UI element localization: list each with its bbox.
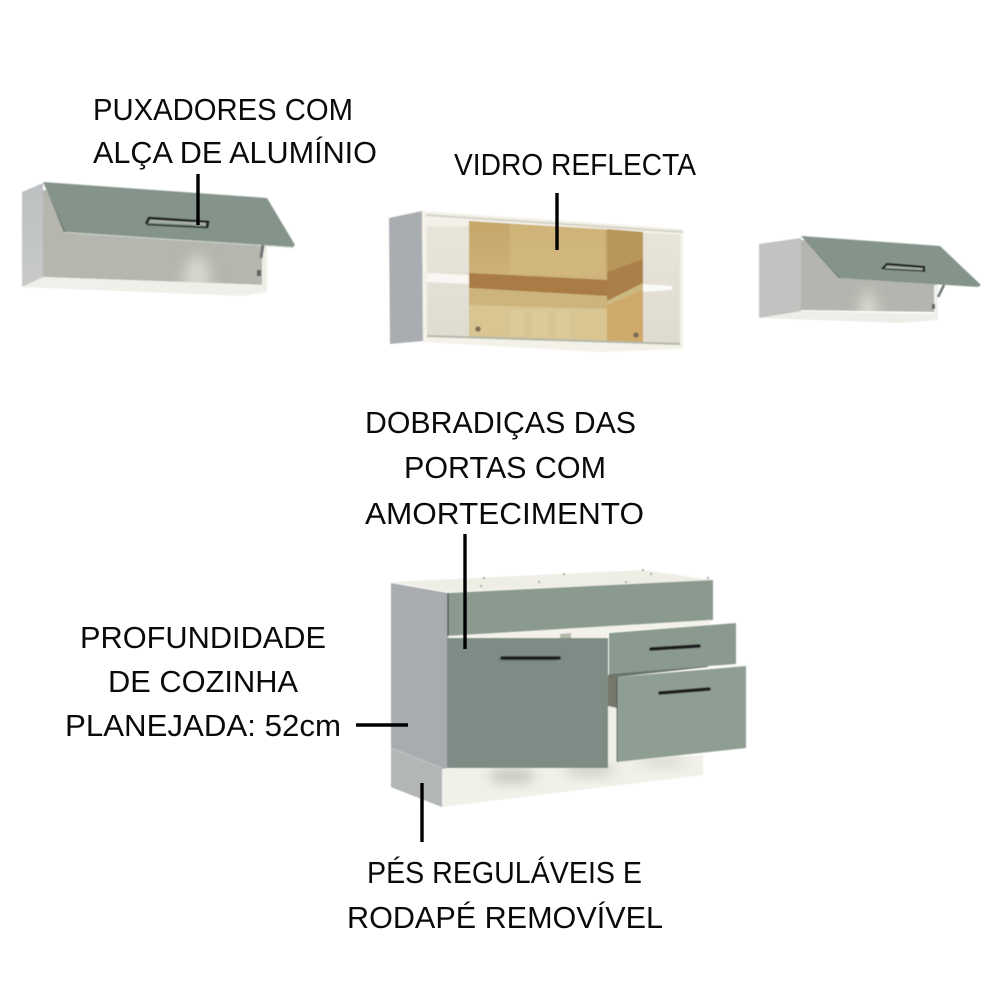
icon: small drawer handle <box>651 646 699 649</box>
panel: top rail <box>448 580 713 636</box>
panel: large drawer <box>617 666 746 762</box>
cabinet: right wall cabinet with lift-up door <box>758 235 982 323</box>
panel: door <box>447 638 608 768</box>
icon: handle <box>146 218 208 228</box>
panel: plinth <box>442 755 703 807</box>
text: puxadores com alça de alumínio <box>93 92 377 170</box>
icon: large drawer handle <box>660 689 709 693</box>
text: profundidade de cozinha planejada: DE COZINHA <box>108 664 298 699</box>
text: pés reguláveis e rodapé removível <box>347 855 663 935</box>
cabinet: glass door wall cabinet <box>389 211 683 352</box>
text: puxadores com alça de alumínio: PUXADORES COM <box>93 92 353 127</box>
panel: side <box>391 583 448 807</box>
cabinet: left wall cabinet with lift-up door <box>22 182 296 296</box>
panel: interior <box>608 675 617 762</box>
panel: white strip <box>448 620 710 640</box>
arrow: feet pointer <box>420 783 424 842</box>
text: profundidade de cozinha planejada: PLANEJADA: 52cm <box>65 708 341 743</box>
panel: top opening <box>391 570 713 592</box>
shelf: left <box>427 273 469 284</box>
arrow: depth pointer <box>356 723 408 727</box>
icon: door handle <box>498 658 559 660</box>
icon: handle <box>882 264 924 272</box>
text: profundidade de cozinha planejada: PROFUNDIDADE <box>80 620 326 655</box>
text: puxadores com alça de alumínio: ALÇA DE ALUMÍNIO <box>93 135 377 170</box>
text: pés reguláveis e rodapé removível: RODAPÉ REMOVÍVEL <box>347 900 663 935</box>
text: profundidade de cozinha planejada <box>65 620 341 743</box>
arrow: handle pointer <box>196 174 200 225</box>
panel: reflective glass <box>469 221 643 343</box>
arrow: glass pointer <box>555 193 559 250</box>
text: pés reguláveis e rodapé removível: PÉS REGULÁVEIS E <box>367 855 642 890</box>
cabinet: base cabinet <box>391 569 746 807</box>
shelf: right <box>643 284 672 292</box>
text: dobradiças das portas com amortecimento: AMORTECIMENTO <box>365 496 644 531</box>
text: dobradiças das portas com amortecimento <box>365 405 644 531</box>
arrow: hinge pointer <box>463 534 467 649</box>
text: dobradiças das portas com amortecimento: PORTAS COM <box>404 450 606 485</box>
text: vidro reflecta: VIDRO REFLECTA <box>454 147 696 182</box>
panel: small drawer <box>609 623 736 674</box>
text: dobradiças das portas com amortecimento: DOBRADIÇAS DAS <box>365 405 636 440</box>
